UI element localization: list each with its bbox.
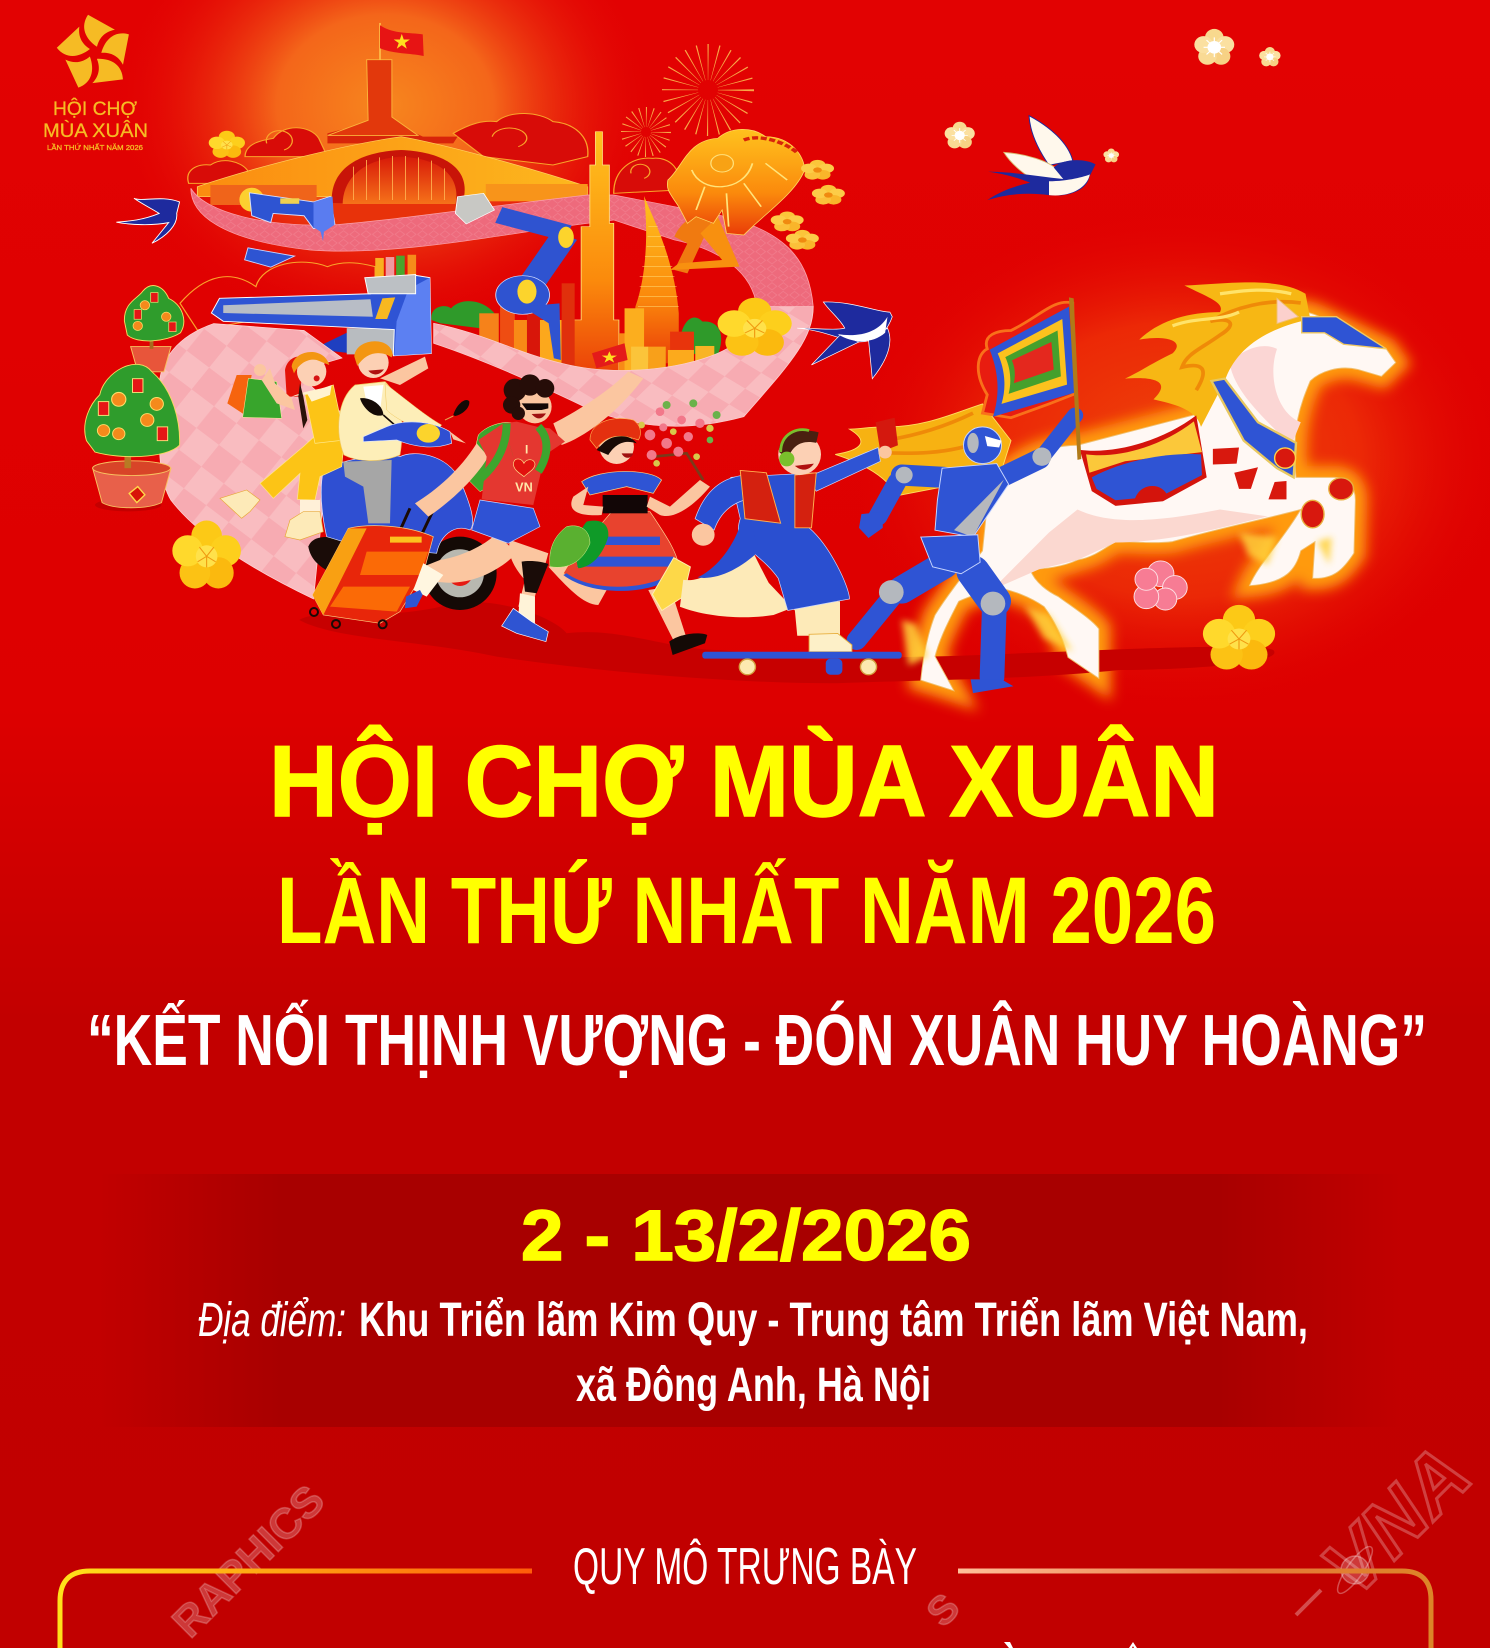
red vest — [740, 470, 816, 528]
t-shirt: I — [525, 442, 528, 456]
leg flames — [902, 532, 1332, 666]
skateboarder — [652, 418, 902, 675]
large yellow flower — [718, 298, 792, 356]
city blocks — [479, 283, 714, 380]
ribbon and city scene — [180, 114, 845, 426]
hall side colonnades — [210, 185, 317, 205]
blossom branch — [638, 399, 721, 480]
neck shading — [1230, 346, 1301, 445]
blue swallow right — [797, 302, 892, 379]
band background — [100, 1174, 1400, 1427]
location label: Địa điểm: — [198, 1294, 346, 1347]
Landmark tower — [572, 132, 619, 380]
trailing shoe — [652, 558, 690, 610]
bodice — [582, 471, 662, 513]
motorbike — [308, 400, 497, 610]
flag: ★ — [393, 33, 411, 52]
plum blossoms — [945, 29, 1281, 162]
horse bridle — [1302, 317, 1386, 349]
date: 2 - 13/2/2026 — [521, 1197, 971, 1276]
pink ribbon lower — [434, 307, 813, 426]
sewing machine — [239, 188, 335, 241]
small yellow flower — [209, 131, 245, 158]
ao dai robe — [731, 473, 850, 610]
watermark GRAPHICS middle: S — [918, 1585, 968, 1635]
main title line 2: LẦN THỨ NHẤT NĂM 2026 — [277, 857, 1216, 964]
festival logo star — [56, 15, 137, 95]
lion dance head — [667, 129, 805, 273]
skirt — [563, 512, 679, 589]
fairground hall roof — [327, 118, 458, 143]
shoe — [809, 633, 852, 652]
head and hat — [590, 419, 640, 464]
ethnic girl — [548, 399, 721, 655]
left sleeve and hand — [692, 475, 754, 546]
left swallow — [116, 198, 180, 243]
section heading: QUY MÔ TRƯNG BÀY — [573, 1538, 917, 1596]
hall arch — [332, 150, 465, 205]
logo wordmark: LẦN THỨ NHẤT NĂM 2026 — [47, 142, 143, 152]
hoof wraps — [1301, 478, 1353, 528]
skateboard — [702, 652, 902, 675]
flag — [380, 23, 424, 60]
shorts — [472, 500, 540, 543]
yellow flower lower left — [172, 521, 241, 588]
robot tail, flag and horse — [797, 29, 1396, 693]
pale pink road — [159, 324, 342, 599]
logo wordmark: MÙA XUÂN — [43, 119, 148, 142]
main title line 1: HỘI CHỢ MÙA XUÂN — [269, 725, 1219, 838]
green trees — [431, 301, 494, 330]
orange sun glow — [115, 0, 655, 330]
logo wordmark — [43, 97, 148, 152]
Bitexco tower — [633, 196, 679, 363]
large kumquat tree — [85, 364, 180, 511]
handlebar and headlight — [363, 422, 466, 447]
tower — [328, 60, 418, 135]
watermarks — [163, 1429, 1487, 1647]
fireworks — [631, 62, 736, 147]
robot arm — [455, 193, 574, 360]
logo wordmark: HỘI CHỢ — [53, 97, 137, 120]
robot rider — [857, 415, 1075, 693]
watermark GRAPHICS left: RAPHICS — [163, 1476, 334, 1647]
large blue machine — [211, 255, 431, 356]
small vietnam flag: ★ — [601, 351, 618, 365]
head with curly hair — [503, 374, 554, 423]
pink flower — [1134, 561, 1187, 610]
hero illustration — [56, 0, 1490, 710]
man driver — [285, 341, 442, 540]
horse body — [921, 311, 1396, 691]
t-shirt — [475, 422, 565, 505]
horse tail — [835, 404, 1011, 500]
festival banner flag — [978, 297, 1081, 460]
arm raising envelope — [807, 418, 898, 491]
horse collar — [1211, 379, 1296, 499]
pink ribbon upper — [191, 188, 813, 307]
mane — [1125, 282, 1310, 427]
date and location band — [100, 1174, 1400, 1427]
suitcase — [310, 508, 433, 628]
machine base — [245, 248, 294, 267]
girl passenger — [220, 352, 345, 518]
ground shadows — [299, 602, 1274, 683]
head with headphones — [778, 430, 821, 475]
raised arm — [553, 372, 643, 445]
clipped next text line — [1004, 1642, 1137, 1648]
front leg and shoe — [502, 540, 548, 642]
arms — [571, 480, 710, 516]
watermark VNA right: VNA — [1305, 1429, 1487, 1611]
hall floor — [327, 204, 466, 225]
cream trousers — [680, 523, 840, 636]
saddle — [1080, 415, 1207, 506]
display scale panel frame — [60, 1571, 1431, 1648]
watermark dash and emblem — [1296, 1542, 1378, 1615]
back leg — [548, 563, 607, 605]
rice cakes — [550, 521, 608, 568]
horse glow — [850, 210, 1490, 710]
backpack — [468, 422, 550, 492]
location line 2: xã Đông Anh, Hà Nội — [576, 1359, 931, 1412]
t-shirt: VN — [515, 480, 533, 494]
horse ear — [1277, 298, 1298, 324]
front leg and shoe — [648, 587, 707, 655]
horse shading — [992, 509, 1268, 590]
back leg and shoe — [405, 533, 517, 608]
small kumquat tree — [124, 286, 184, 372]
tower and flag — [56, 15, 431, 599]
motorbike riders — [220, 341, 497, 628]
shopping bags — [227, 375, 282, 418]
running traveller — [405, 372, 643, 642]
small vietnam flag — [592, 343, 628, 368]
clouds — [180, 114, 680, 330]
white swallow — [987, 116, 1096, 200]
apricot branch — [771, 160, 845, 250]
lower arm — [415, 443, 488, 517]
yellow flower right — [1203, 605, 1275, 669]
robe back flap — [698, 505, 759, 578]
